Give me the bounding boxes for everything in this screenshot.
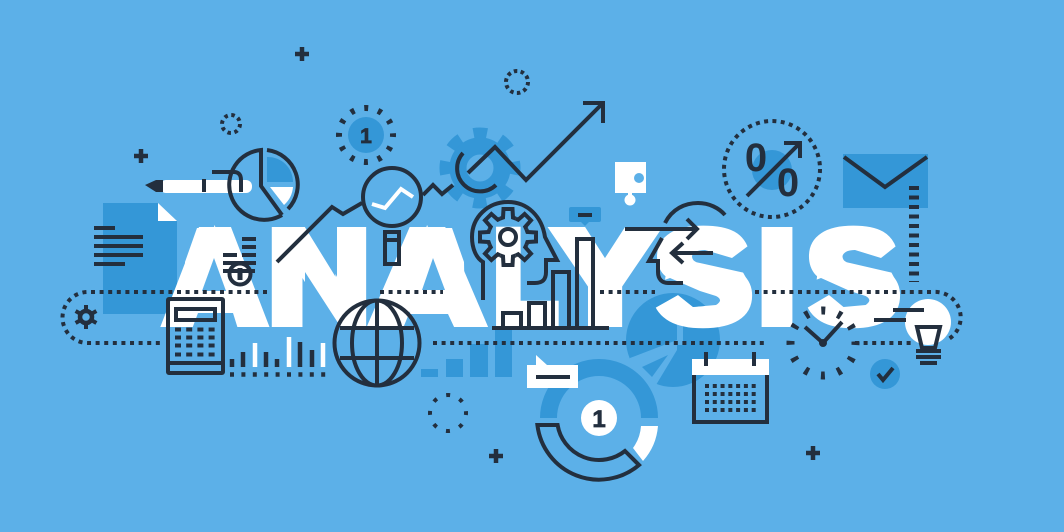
title: Y <box>557 206 653 349</box>
title: A <box>166 206 264 349</box>
document background shape <box>103 203 177 314</box>
icon: calculator <box>168 299 223 373</box>
icon: puzzle piece <box>615 162 646 206</box>
blue callout <box>569 207 601 226</box>
white callout <box>527 355 578 388</box>
blue pie background <box>622 290 720 395</box>
icon: check badge <box>870 359 900 389</box>
donut chart <box>537 367 658 480</box>
icon: numbered sun badge <box>339 108 393 162</box>
title: S <box>655 206 751 349</box>
plus signs <box>134 47 820 463</box>
pie edge visible inside S counter <box>646 293 706 308</box>
percent blue circle <box>752 150 792 190</box>
icon: pen <box>145 172 252 193</box>
title weight adjustments: white fill <box>185 228 898 322</box>
icon: head with gear <box>472 202 557 300</box>
small bar chart <box>230 337 326 374</box>
blue mail envelope <box>843 154 928 208</box>
dotted circles <box>222 71 528 431</box>
dotted mail connector <box>909 186 919 282</box>
icon: coin stack <box>223 239 256 284</box>
title counters <box>192 226 908 329</box>
blue bar chart background <box>421 330 512 377</box>
title: S <box>807 206 899 349</box>
blue gear background <box>446 134 514 202</box>
title: I <box>759 206 795 349</box>
icon: numbered sun badge: 1 <box>360 125 372 148</box>
donut chart: 1 <box>592 406 606 433</box>
icon: small gear <box>76 305 96 329</box>
icon: growth line with arrow <box>277 103 603 262</box>
icon: clock <box>790 310 856 376</box>
icon: light bulb <box>874 299 951 363</box>
icon: calendar <box>692 352 769 422</box>
title: N <box>269 206 369 349</box>
icon: pie chart <box>229 150 298 220</box>
icon: document text lines <box>94 228 143 264</box>
dotted track <box>62 292 961 343</box>
icon: exchange arrows and face <box>625 203 725 283</box>
title: L <box>494 206 557 349</box>
icon: rising bar chart <box>492 239 609 328</box>
icon: globe <box>334 300 420 386</box>
icon: percent badge <box>724 121 820 217</box>
title: A <box>373 206 482 349</box>
icon: percent badge: 0 <box>745 136 767 180</box>
icon: magnifier <box>363 168 421 264</box>
icon: percent badge: 0 <box>777 161 799 205</box>
